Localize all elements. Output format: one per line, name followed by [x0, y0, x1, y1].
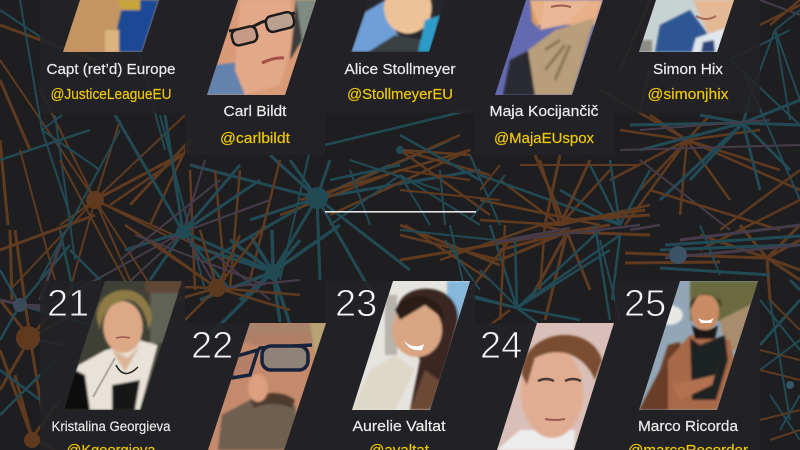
card: Simon Hix	[639, 0, 734, 102]
photo	[639, 0, 734, 52]
photo	[60, 0, 160, 52]
photo	[60, 281, 185, 410]
handle: @StollmeyerEU	[347, 86, 453, 103]
card: Capt (ret'd) Europe	[46, 0, 176, 103]
name: Carl Bildt	[224, 103, 287, 120]
card: Aurelie Valtat	[335, 281, 472, 450]
photo	[495, 0, 605, 95]
card: Carl Bildt	[205, 0, 317, 147]
handle: @MajaEUspox	[494, 130, 594, 147]
name: Capt (ret’d) Europe	[46, 61, 176, 78]
photo	[495, 323, 617, 450]
rank number: 23	[335, 283, 377, 325]
rank number: 25	[624, 283, 666, 325]
photo	[350, 281, 472, 410]
photo	[636, 281, 760, 410]
name: Kristalina Georgieva	[52, 419, 171, 434]
card: Kristalina Georgieva	[47, 281, 185, 450]
card: Alice Stollmeyer	[344, 0, 456, 103]
rank number: 22	[191, 325, 233, 367]
photo	[205, 0, 317, 95]
divider	[325, 211, 476, 213]
handle: @JusticeLeagueEU	[50, 86, 172, 103]
name: Alice Stollmeyer	[344, 61, 456, 78]
rank number: 21	[47, 283, 89, 325]
handle: @simonjhix	[648, 86, 729, 103]
card: rank 22	[191, 323, 330, 450]
name: Marco Ricorda	[638, 418, 739, 435]
name: Simon Hix	[653, 61, 724, 78]
handle: @carlbildt	[220, 130, 291, 147]
rank number: 24	[480, 325, 522, 367]
card: rank 24	[480, 323, 617, 450]
card: Marco Ricorda	[624, 281, 760, 450]
photo	[205, 323, 330, 450]
name: Aurelie Valtat	[352, 418, 446, 435]
name: Maja Kocijančič	[490, 103, 599, 120]
photo	[350, 0, 448, 52]
card: Maja Kocijančič	[490, 0, 605, 147]
